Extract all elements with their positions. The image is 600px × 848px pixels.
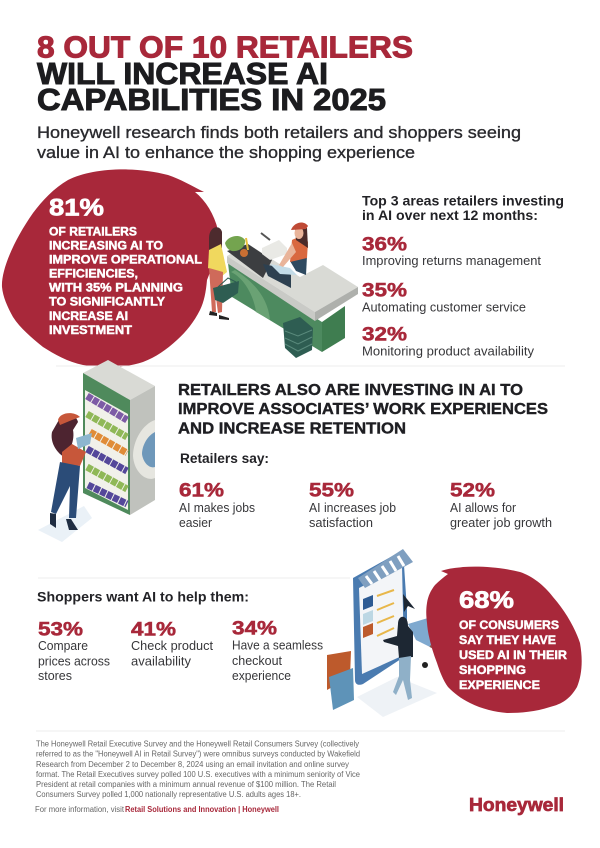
conveyor belt	[227, 244, 272, 278]
awning	[358, 549, 413, 588]
stat 32%	[362, 325, 535, 359]
Honeywell wordmark: Honeywell	[469, 794, 564, 815]
stat 55%	[309, 481, 396, 530]
illustration: associate with shelves	[38, 360, 155, 542]
more information line	[35, 805, 279, 814]
stat 34%	[232, 618, 323, 683]
counter front	[228, 263, 322, 352]
stat 53%: Compare	[38, 639, 88, 653]
callout text	[49, 225, 202, 337]
callout text: OF RETAILERS	[49, 225, 137, 239]
red blob	[2, 169, 218, 367]
footnote: referred to as the "Honeywell AI in Retail Survey") were omnibus surveys conducted by Wakefield	[36, 750, 360, 759]
shopping bags	[327, 651, 351, 690]
stat 52%: greater job growth	[450, 516, 552, 530]
section heading: associates: AND INCREASE RETENTION	[178, 420, 406, 438]
red blob	[426, 567, 582, 713]
cart	[408, 618, 444, 648]
product list	[363, 595, 373, 610]
stat 52%	[450, 481, 552, 530]
footnote: The Honeywell Retail Executive Survey and the Honeywell Retail Consumers Survey (collectively	[36, 739, 359, 748]
callout text: OF CONSUMERS	[459, 618, 559, 632]
stat 53%: prices across	[38, 655, 110, 669]
stat 61%: 61%	[179, 481, 224, 502]
stat 53%	[38, 620, 110, 683]
stat 61%	[179, 481, 255, 530]
stat 36%	[362, 235, 542, 268]
callout text: USED AI IN THEIR	[459, 648, 567, 662]
cashier	[279, 223, 308, 275]
81% figure: 81%	[49, 195, 104, 222]
illustration: checkout counter	[208, 223, 358, 358]
callout text: INCREASE AI	[49, 309, 128, 323]
footnote: Consumers Survey polled 1,000 nationally representative U.S. adults ages 18+.	[36, 790, 301, 799]
stat 32%: 32%	[362, 325, 407, 346]
68% figure: 68%	[459, 587, 514, 614]
title: WILL INCREASE AI	[37, 56, 328, 91]
stat 53%: 53%	[38, 620, 83, 641]
shelf unit	[83, 360, 155, 400]
blue round decal	[133, 420, 155, 479]
footnote: President at retail companies with a minimum annual revenue of $100 million. The Retail	[36, 780, 336, 789]
title: CAPABILITIES IN 2025	[37, 82, 386, 117]
stat 36%: 36%	[362, 235, 407, 256]
scanner	[263, 264, 291, 288]
stat 35%	[362, 281, 526, 315]
stat 35%: 35%	[362, 281, 407, 302]
stat 41%	[131, 620, 214, 669]
callout text: INCREASING AI TO	[49, 239, 163, 253]
shopping basket	[213, 281, 239, 303]
footnote	[36, 739, 361, 799]
stat 34%: 34%	[232, 618, 277, 640]
callout text: INVESTMENT	[49, 323, 133, 337]
callout text: WITH 35% PLANNING	[49, 281, 183, 295]
illustration: phone shopper	[327, 549, 446, 717]
more information line: Retail Solutions and Innovation | Honeywell	[125, 805, 279, 814]
callout text: IMPROVE OPERATIONAL	[49, 253, 202, 267]
subtitle: value in AI to enhance the shopping experience	[37, 143, 415, 162]
counter top	[227, 244, 358, 312]
stat 52%: AI allows for	[450, 501, 516, 515]
shopper	[208, 227, 229, 320]
subtitle: Honeywell research finds both retailers and shoppers seeing	[37, 123, 521, 142]
section heading: associates: RETAILERS ALSO ARE INVESTING IN AI TO	[178, 382, 523, 399]
stat 55%: AI increases job	[309, 501, 396, 515]
woman with tablet	[38, 413, 92, 542]
footnote: format. The Retail Executives survey polled 100 U.S. executives with a minimum seniority of Vice	[36, 770, 361, 779]
callout text: TO SIGNIFICANTLY	[49, 295, 165, 309]
subtitle	[37, 123, 521, 162]
title	[37, 30, 413, 117]
more information line: For more information, visit	[35, 805, 125, 814]
stat 61%: AI makes jobs	[179, 501, 255, 515]
subheading: shoppers: Shoppers want AI to help them:	[37, 590, 249, 605]
section heading: associates	[178, 382, 548, 438]
panel: 68% callout	[426, 567, 582, 713]
section heading: associates: IMPROVE ASSOCIATES’ WORK EXPERIENCES	[178, 401, 548, 418]
stat 34%: experience	[232, 669, 291, 683]
callout text: SAY THEY HAVE	[459, 633, 556, 647]
stat 55%: 55%	[309, 481, 354, 502]
cursor	[403, 594, 415, 612]
stat 41%: Check product	[131, 639, 214, 653]
stat 36%: Improving returns management	[362, 254, 542, 268]
panel heading: in AI over next 12 months:	[362, 208, 538, 223]
ground shadow	[357, 677, 437, 717]
stat 55%: satisfaction	[309, 516, 373, 530]
title: 8 OUT OF 10 RETAILERS	[37, 30, 413, 64]
stat 53%: stores	[38, 669, 72, 683]
callout text	[459, 618, 567, 692]
stat 35%: Automating customer service	[362, 301, 526, 315]
panel heading	[362, 194, 564, 223]
shelf products	[87, 396, 127, 504]
shopper	[383, 617, 413, 658]
register	[262, 240, 287, 260]
panel: 81% callout	[2, 169, 218, 367]
footnote: Research from December 2 to December 8, 2024 using an email invitation and online survey	[36, 760, 349, 769]
stacked baskets	[283, 317, 313, 358]
callout text: EXPERIENCE	[459, 678, 540, 692]
callout text: EFFICIENCIES,	[49, 267, 138, 281]
stat 41%: availability	[131, 655, 192, 669]
callout text: SHOPPING	[459, 663, 526, 677]
stat 32%: Monitoring product availability	[362, 345, 535, 359]
phone	[353, 550, 407, 685]
panel: top 3 areas	[362, 194, 564, 359]
stat 34%: Have a seamless	[232, 639, 323, 653]
stat 34%: checkout	[232, 654, 283, 668]
panel heading: Top 3 areas retailers investing	[362, 194, 564, 209]
stat 61%: easier	[179, 516, 212, 530]
subheading: retailers say: Retailers say:	[180, 451, 269, 466]
stat 52%: 52%	[450, 481, 495, 502]
stat 41%: 41%	[131, 620, 176, 641]
produce	[225, 236, 245, 251]
